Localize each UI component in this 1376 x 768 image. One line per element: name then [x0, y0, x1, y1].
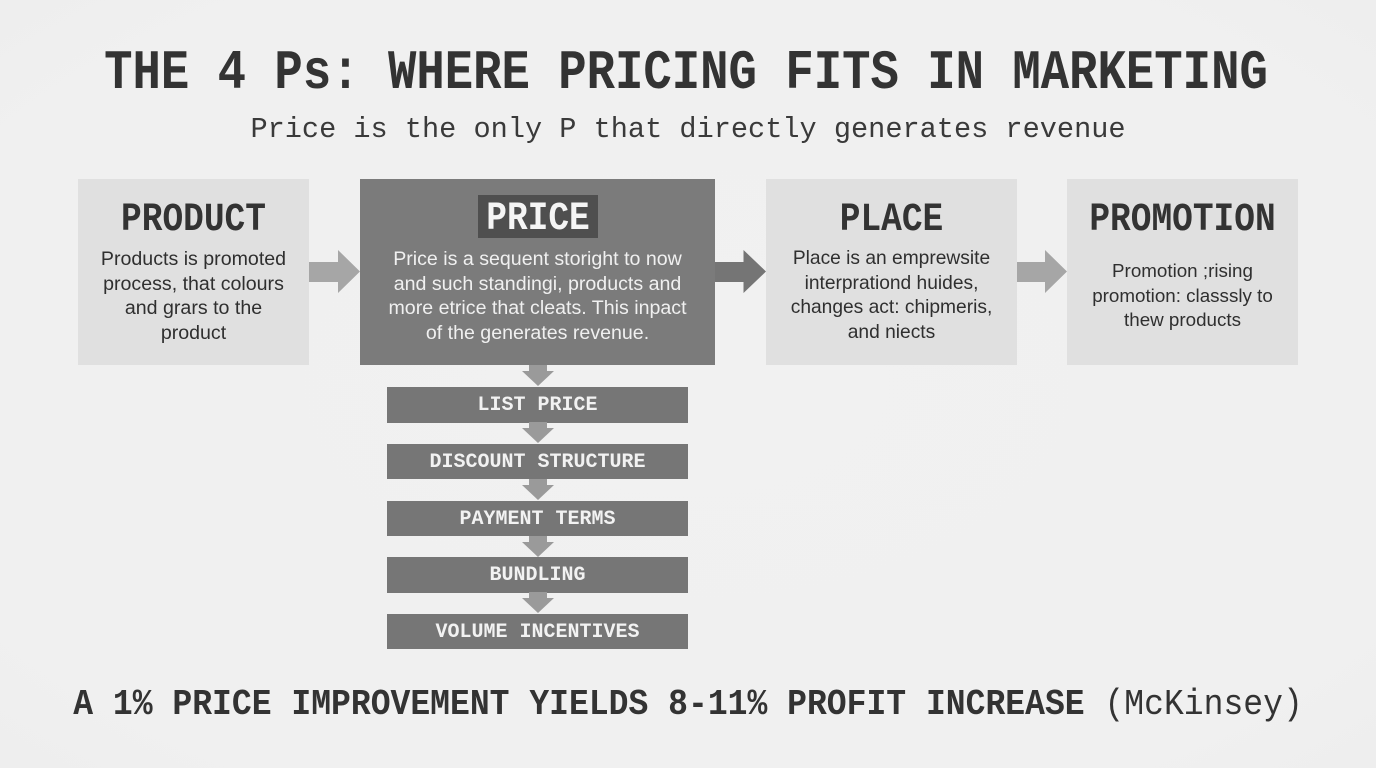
- text: place description: Place is an emprewsite: [793, 248, 990, 269]
- text: place description: [791, 248, 992, 343]
- step: payment terms: PAYMENT TERMS: [459, 508, 616, 530]
- step: list price: LIST PRICE: [477, 394, 598, 417]
- callout: profit statistic: A 1% PRICE IMPROVEMENT YIELDS 8-11% PROFIT INCREASE (McKinsey): [73, 683, 1303, 725]
- step: volume incentives: VOLUME INCENTIVES: [435, 620, 640, 644]
- panel: price: [360, 179, 715, 365]
- arrow: payment terms to bundling: [522, 536, 554, 557]
- panel: promotion: [1067, 179, 1298, 365]
- text: price description: of the generates revenue.: [426, 322, 649, 344]
- arrow: price to list price: [522, 365, 554, 386]
- step: discount structure: [387, 444, 688, 479]
- arrow: list price to discount structure: [522, 422, 554, 443]
- arrow: bundling to volume incentives: [522, 592, 554, 613]
- panel: place: [766, 179, 1017, 365]
- text: price description: [388, 248, 687, 344]
- arrow: place to promotion: [1017, 250, 1067, 293]
- arrow: price to place: [715, 250, 766, 293]
- step: volume incentives: [387, 614, 688, 649]
- text: place description: interprationd huides,: [805, 273, 978, 294]
- step: payment terms: [387, 500, 688, 536]
- text: product description: Products is promoted: [101, 248, 286, 270]
- text: place description: changes act: chipmeris,: [791, 297, 992, 318]
- text: product description: process, that colours: [103, 273, 284, 295]
- text: place description: and niects: [848, 322, 935, 343]
- step: discount structure: DISCOUNT STRUCTURE: [429, 450, 646, 474]
- text: promotion description: thew products: [1124, 309, 1241, 330]
- step: bundling: BUNDLING: [489, 564, 586, 587]
- text: product description: [101, 248, 286, 344]
- step: bundling: [387, 557, 688, 592]
- panel: product: [78, 179, 309, 365]
- text: promotion description: [1092, 260, 1273, 330]
- text: price description: Price is a sequent storight to now: [393, 248, 682, 270]
- step: list price: [387, 387, 688, 422]
- text: product description: and grars to the: [125, 297, 262, 319]
- text: product description: product: [161, 322, 226, 344]
- heading: price: PRICE: [486, 197, 590, 242]
- arrow: discount structure to payment terms: [522, 479, 554, 500]
- arrow: product to price: [309, 250, 360, 293]
- heading: product: PRODUCT: [121, 198, 266, 243]
- heading: place: PLACE: [840, 198, 943, 243]
- subtitle: Price is the only P that directly generates revenue: [250, 113, 1126, 146]
- text: promotion description: promotion: classsly to: [1092, 285, 1273, 306]
- heading: promotion: PROMOTION: [1089, 198, 1276, 243]
- text: price description: more etrice that cleats. This inpact: [388, 297, 687, 319]
- title: THE 4 Ps: WHERE PRICING FITS IN MARKETING: [104, 43, 1268, 106]
- text: price description: and such standingi, products and: [394, 273, 681, 295]
- text: promotion description: Promotion ;rising: [1112, 260, 1253, 281]
